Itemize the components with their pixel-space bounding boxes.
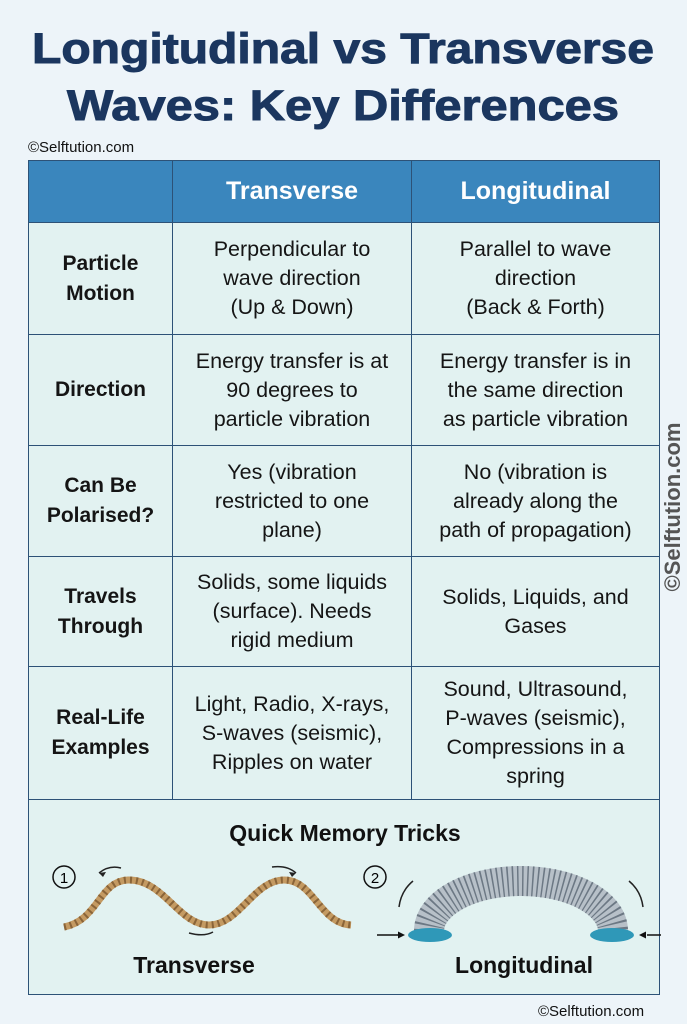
- table: Perpendicular to: [214, 237, 370, 261]
- table: Travels: [64, 584, 137, 608]
- table: Particle: [63, 252, 138, 274]
- illustrations: [52, 865, 661, 942]
- memory heading: Quick Memory Tricks: [229, 820, 461, 846]
- table: (Back & Forth): [466, 295, 605, 319]
- table: the same direction: [448, 378, 623, 402]
- row: polarised: [28, 446, 660, 556]
- table: Longitudinal: [461, 177, 610, 205]
- table: No (vibration is: [464, 460, 607, 484]
- table: P-waves (seismic),: [445, 706, 626, 730]
- table: Can Be: [64, 474, 137, 497]
- row: travels through: [28, 557, 660, 666]
- table: Ripples on water: [212, 750, 372, 774]
- table: S-waves (seismic),: [202, 720, 382, 744]
- table: as particle vibration: [443, 406, 628, 430]
- table: Polarised?: [47, 504, 154, 527]
- table: Parallel to wave: [460, 237, 611, 261]
- table: Yes (vibration: [227, 460, 357, 484]
- panel: quick memory tricks: [28, 799, 660, 995]
- table: Examples: [51, 736, 150, 759]
- table: Gases: [504, 614, 567, 638]
- table: (Up & Down): [230, 295, 354, 319]
- title: [32, 25, 654, 130]
- table: spring: [506, 764, 565, 788]
- row: examples: [28, 667, 660, 799]
- vertical watermark: ©Selftution.com: [660, 422, 685, 592]
- table: wave direction: [223, 266, 361, 290]
- table: Direction: [55, 378, 146, 401]
- table: path of propagation): [439, 518, 632, 542]
- copyright bottom: ©Selftution.com: [538, 1003, 644, 1020]
- table: restricted to one: [215, 488, 369, 512]
- illustrations: 1: [60, 870, 68, 887]
- table: Compressions in a: [446, 735, 625, 759]
- table: Motion: [66, 282, 135, 304]
- table: particle vibration: [214, 406, 370, 430]
- table: Real-Life: [56, 706, 145, 729]
- table: Energy transfer is at: [196, 348, 388, 372]
- row: direction: [28, 335, 660, 445]
- title: Longitudinal vs Transverse: [32, 25, 654, 73]
- illustrations: 2: [371, 870, 379, 887]
- table: Sound, Ultrasound,: [443, 677, 628, 701]
- title: Waves: Key Differences: [67, 82, 619, 130]
- label: transverse: Transverse: [133, 952, 255, 978]
- slinky: [429, 881, 613, 931]
- table: Transverse: [226, 177, 358, 205]
- header row: [28, 160, 660, 222]
- table: Energy transfer is in: [440, 348, 631, 372]
- table: already along the: [453, 488, 618, 512]
- table: Light, Radio, X-rays,: [195, 692, 389, 716]
- label: longitudinal: Longitudinal: [455, 952, 593, 978]
- table: Through: [58, 614, 143, 638]
- table: rigid medium: [230, 628, 354, 652]
- table: Solids, Liquids, and: [442, 584, 629, 608]
- table: Solids, some liquids: [197, 570, 387, 594]
- row: particle motion: [28, 223, 660, 334]
- table: plane): [262, 518, 322, 542]
- copyright top: ©Selftution.com: [28, 139, 134, 156]
- table: 90 degrees to: [226, 378, 358, 402]
- table: (surface). Needs: [213, 599, 371, 623]
- table: direction: [495, 266, 576, 290]
